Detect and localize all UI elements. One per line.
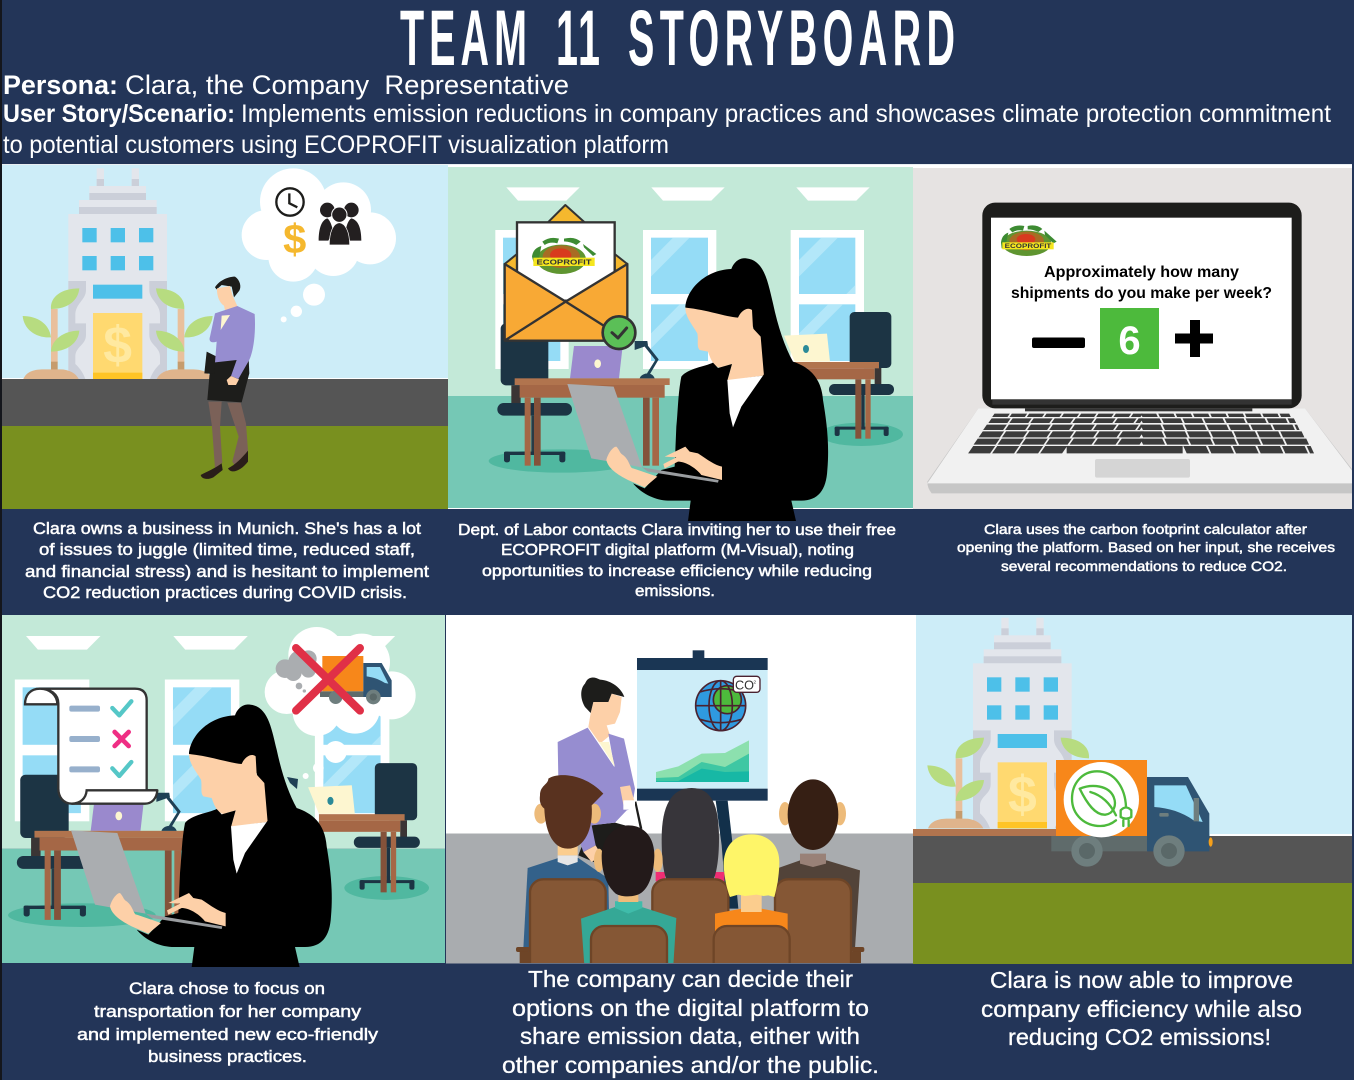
icon: dollar: $ (283, 215, 306, 262)
ecoprofit logo: ECOPROFIT (1005, 243, 1051, 250)
caption 6: reducing CO2 emissions! (1008, 1024, 1271, 1050)
left edge (0, 0, 2, 1080)
icon: globe: 2 (753, 680, 756, 686)
user story text: User Story/Scenario: (3, 100, 235, 128)
caption 1: and financial stress) and is hesitant to implement (25, 562, 429, 581)
caption 3: Clara uses the carbon footprint calculator after (984, 521, 1307, 537)
caption 5: other companies and/or the public. (502, 1052, 879, 1078)
area chart (656, 740, 749, 782)
calculator question: shipments do you make per week? (1011, 285, 1272, 302)
ecoprofit logo (532, 238, 596, 274)
ecoprofit logo: ECOPROFIT (536, 257, 592, 266)
audience front row (581, 825, 788, 965)
caption 1: Clara owns a business in Munich. She's has a lot (33, 519, 421, 538)
office background (0, 608, 454, 985)
truck (322, 656, 363, 691)
caption 5: options on the digital platform to (512, 995, 869, 1021)
panel 3: carbon calculator on laptop (913, 165, 1354, 509)
truck with eco logo (913, 760, 1213, 867)
plus button (1175, 320, 1213, 357)
caption 6: company efficiency while also (981, 996, 1302, 1022)
office tower with plant: $ (1008, 765, 1037, 823)
minus button (1032, 338, 1085, 348)
caption 2: ECOPROFIT digital platform (M-Visual), noting (501, 542, 854, 559)
Clara standing (201, 277, 255, 479)
panel 5: presentation (446, 615, 913, 993)
office tower with plants (23, 168, 213, 379)
caption 2: Dept. of Labor contacts Clara inviting her to use their free (458, 522, 896, 539)
caption 3: several recommendations to reduce CO2. (1001, 558, 1287, 574)
icon: globe: CO (735, 679, 754, 693)
audience back row (523, 775, 860, 962)
chairs front row (590, 924, 791, 963)
keyboard (971, 415, 1312, 450)
panel 2: invitation email (441, 160, 928, 529)
icon: clock (276, 188, 304, 216)
panel 4: choosing transportation (0, 608, 454, 985)
smoke (276, 650, 317, 693)
user story text: Implements emission reductions in company practices and showcases climate protection commitment (241, 100, 1331, 128)
icon: people (319, 203, 361, 245)
icon: envelope with logo letter (505, 205, 635, 349)
caption 4: Clara chose to focus on (129, 979, 325, 998)
presenter (558, 677, 642, 865)
caption 2: emissions. (635, 583, 715, 600)
presentation board (637, 650, 768, 909)
caption 6: Clara is now able to improve (990, 967, 1293, 993)
icon: leaf with plug (1072, 771, 1131, 826)
caption 3: opening the platform. Based on her input, she receives (957, 539, 1335, 555)
lamp head behind Clara (287, 777, 298, 789)
panel 1: Clara with worries (2, 165, 448, 509)
user story text: to potential customers using ECOPROFIT visualization platform (3, 131, 669, 159)
office tower with plants: $ (103, 316, 132, 374)
value box (1100, 308, 1159, 369)
caption 5: The company can decide their (528, 966, 853, 992)
caption 2: opportunities to increase efficiency while reducing (482, 563, 872, 580)
user story text (3, 100, 1331, 159)
office background (448, 167, 913, 508)
thought cloud (242, 168, 396, 322)
caption 5 (502, 966, 879, 1078)
caption 6 (981, 967, 1302, 1050)
persona line: Clara, the Company Representative (125, 70, 569, 100)
caption 1: CO2 reduction practices during COVID crisis. (43, 583, 407, 602)
caption 5: share emission data, either with (520, 1023, 860, 1049)
calculator question: Approximately how many (1044, 264, 1239, 281)
laptop (927, 203, 1354, 493)
icon: checklist scroll (25, 689, 157, 804)
white rule (2, 164, 1352, 166)
persona line: Persona: (3, 70, 118, 100)
Clara at laptop (567, 258, 828, 521)
thought cloud: no polluting truck (265, 627, 416, 779)
calculator question (1011, 264, 1272, 302)
Clara at laptop (71, 705, 332, 967)
caption 3 (957, 521, 1335, 574)
caption 2 (458, 522, 896, 600)
title (400, 0, 955, 83)
caption 1 (25, 519, 429, 602)
icon: globe (696, 676, 760, 731)
value box: 6 (1118, 319, 1141, 363)
panel 6: eco-friendly truck (913, 615, 1352, 964)
ecoprofit logo (1001, 225, 1057, 256)
red cross (296, 648, 360, 711)
caption 4 (77, 979, 379, 1066)
caption 4: business practices. (148, 1047, 307, 1066)
caption 4: transportation for her company (94, 1002, 362, 1021)
chairs back row (528, 878, 852, 963)
office tower with plant (927, 618, 1089, 828)
caption 4: and implemented new eco-friendly (77, 1025, 379, 1044)
caption 1: of issues to juggle (limited time, reduced staff, (39, 540, 415, 559)
